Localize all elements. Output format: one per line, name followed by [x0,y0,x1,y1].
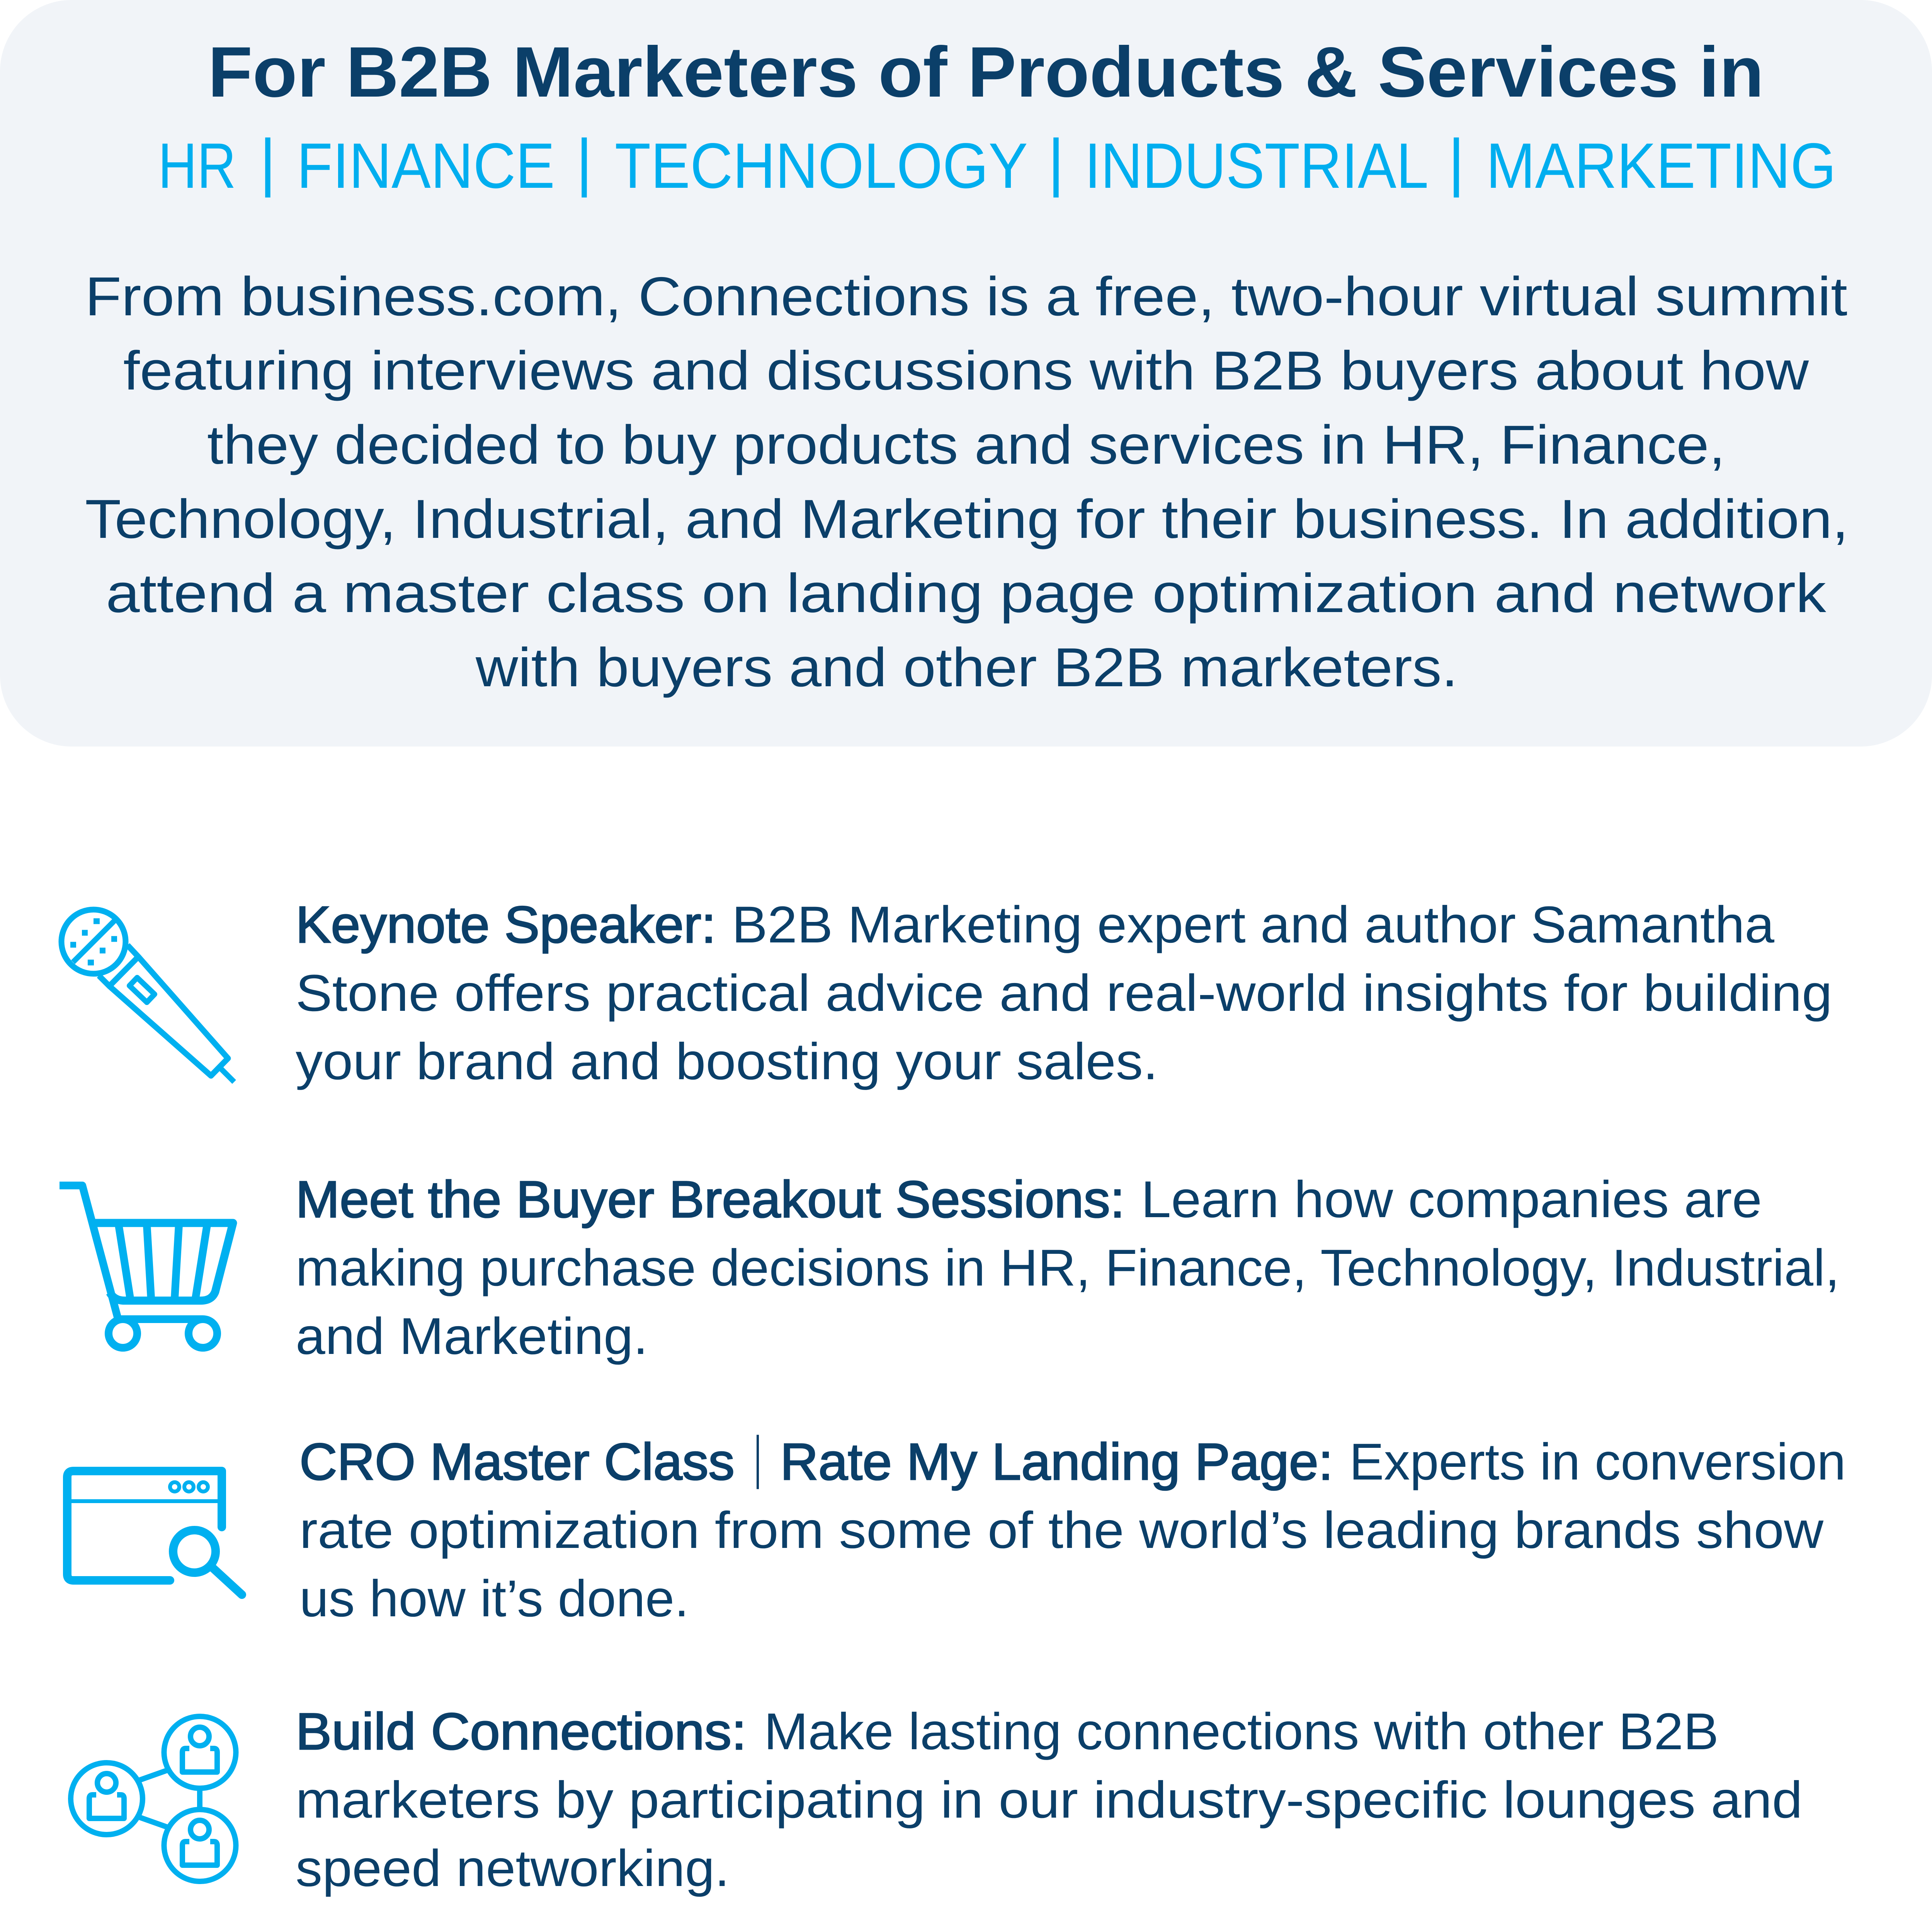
panel: intro [0,0,1932,747]
title: For B2B Marketers of Products & Services in [208,32,1764,112]
icon: network of people [71,1716,236,1881]
feature: meet the buyer: making purchase decisions in HR, Finance, Technology, Industrial, [296,1239,1840,1297]
feature: keynote speaker: Keynote Speaker: [296,896,716,954]
icon: shopping cart [60,1185,233,1348]
feature: CRO master class: rate optimization from some of the world’s leading brands show [299,1502,1824,1559]
icon: browser with magnifier [67,1471,242,1595]
subtitle: industries: INDUSTRIAL [1085,130,1429,202]
subtitle: industries: | [259,126,276,198]
subtitle: industries: | [576,126,593,198]
intro paragraph [85,266,1849,698]
intro paragraph: with buyers and other B2B marketers. [475,637,1458,698]
feature: meet the buyer: Learn how companies are [1141,1171,1762,1228]
intro paragraph: they decided to buy products and services in HR, Finance, [207,414,1725,476]
feature: keynote speaker [296,896,1832,1090]
feature: keynote speaker: B2B Marketing expert and author Samantha [732,896,1774,954]
feature: build connections: Make lasting connections with other B2B [764,1703,1719,1760]
feature: CRO master class: CRO Master Class [299,1433,735,1491]
feature: meet the buyer: Meet the Buyer Breakout Sessions: [296,1171,1125,1228]
intro paragraph: attend a master class on landing page optimization and network [106,563,1827,624]
subtitle: industries: MARKETING [1486,130,1836,202]
panel background [0,0,1932,747]
feature: build connections [296,1703,1803,1897]
intro paragraph: featuring interviews and discussions with B2B buyers about how [123,340,1809,401]
feature: build connections: speed networking. [296,1840,730,1897]
feature: meet the buyer [296,1171,1840,1365]
intro paragraph: Technology, Industrial, and Marketing for their business. In addition, [85,488,1849,550]
feature: keynote speaker: your brand and boosting your sales. [296,1033,1158,1090]
feature: keynote speaker: Stone offers practical advice and real-world insights for building [296,964,1832,1022]
intro paragraph: From business.com, Connections is a free, two-hour virtual summit [85,266,1847,327]
feature: build connections: Build Connections: [296,1703,747,1760]
feature: CRO master class: us how it’s done. [299,1570,689,1628]
feature: build connections: marketers by participating in our industry-specific lounges and [296,1771,1803,1829]
feature: CRO master class [299,1425,1846,1628]
subtitle: industries: HR [158,130,236,202]
feature: CRO master class: Rate My Landing Page: [780,1433,1333,1491]
feature: meet the buyer: and Marketing. [296,1308,648,1365]
feature: CRO master class: | [754,1425,762,1490]
subtitle: industries: | [1048,126,1065,198]
subtitle: industries: TECHNOLOGY [615,130,1028,202]
feature: CRO master class: Experts in conversion [1349,1433,1846,1491]
icon: microphone [61,910,234,1082]
subtitle: industries: FINANCE [297,130,555,202]
subtitle: industries: | [1448,126,1465,198]
subtitle: industries [158,126,1836,202]
